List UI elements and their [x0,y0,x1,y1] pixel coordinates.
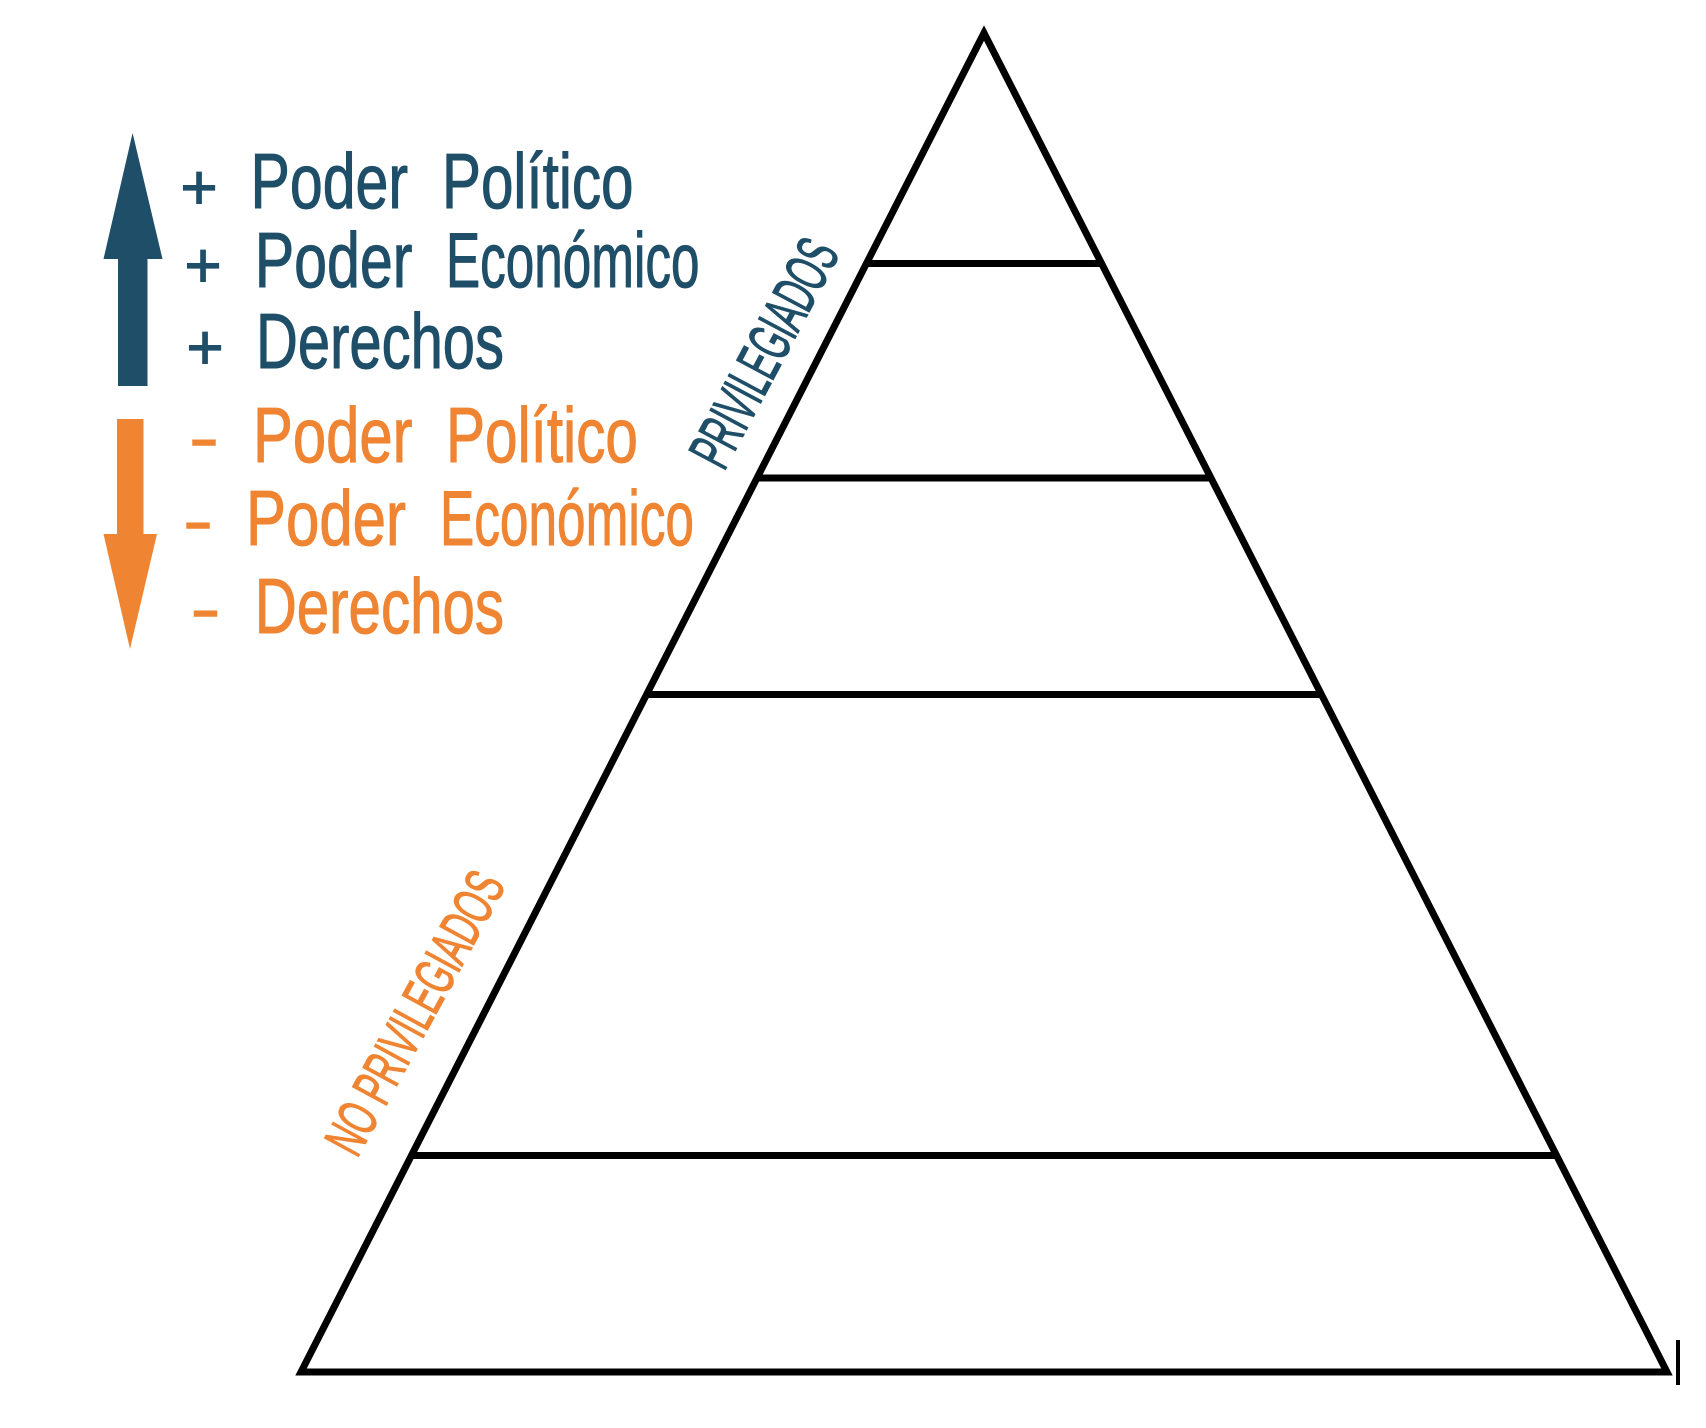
legend line: minus political power: - [190,405,218,472]
legend line: plus rights: Derechos [256,297,504,385]
tier divider 2 [756,474,1212,482]
legend line: plus rights [186,297,504,385]
legend line: plus political power: + [180,151,218,223]
legend line: minus rights: Derechos [255,562,504,650]
legend line: minus economic power [184,474,694,562]
legend: non-privileged attributes [184,391,694,650]
legend line: minus political power: Poder [253,391,412,479]
pyramid [301,33,1667,1372]
legend: privileged attributes [180,137,700,385]
legend line: minus economic power: Económico [440,474,694,562]
legend line: minus political power [190,391,638,479]
label: non-privileged: NO PRIVILEGIADOS [312,861,517,1165]
icon: up arrow [104,133,162,386]
icon: down arrow [104,419,157,649]
tier divider 4 [412,1152,1556,1159]
label: privileged: PRIVILEGIADOS [676,228,852,478]
tier divider 3 [647,691,1323,698]
cursor mark at bottom right [1676,1340,1680,1385]
legend line: plus economic power: Económico [446,216,700,304]
legend line: plus political power [180,137,634,225]
legend line: plus economic power [184,216,700,304]
legend line: minus economic power: - [184,488,212,555]
legend line: plus political power: Político [442,137,634,225]
legend line: minus political power: Político [446,391,638,479]
legend line: minus rights [191,562,504,650]
legend line: minus rights: - [191,576,220,643]
legend line: plus political power: Poder [250,137,408,225]
legend line: plus rights: + [186,311,224,383]
legend line: minus economic power: Poder [246,474,406,562]
pyramid outline [301,33,1667,1372]
legend line: plus economic power: + [184,229,222,301]
legend line: plus economic power: Poder [255,216,412,304]
tier divider 1 [866,260,1102,267]
